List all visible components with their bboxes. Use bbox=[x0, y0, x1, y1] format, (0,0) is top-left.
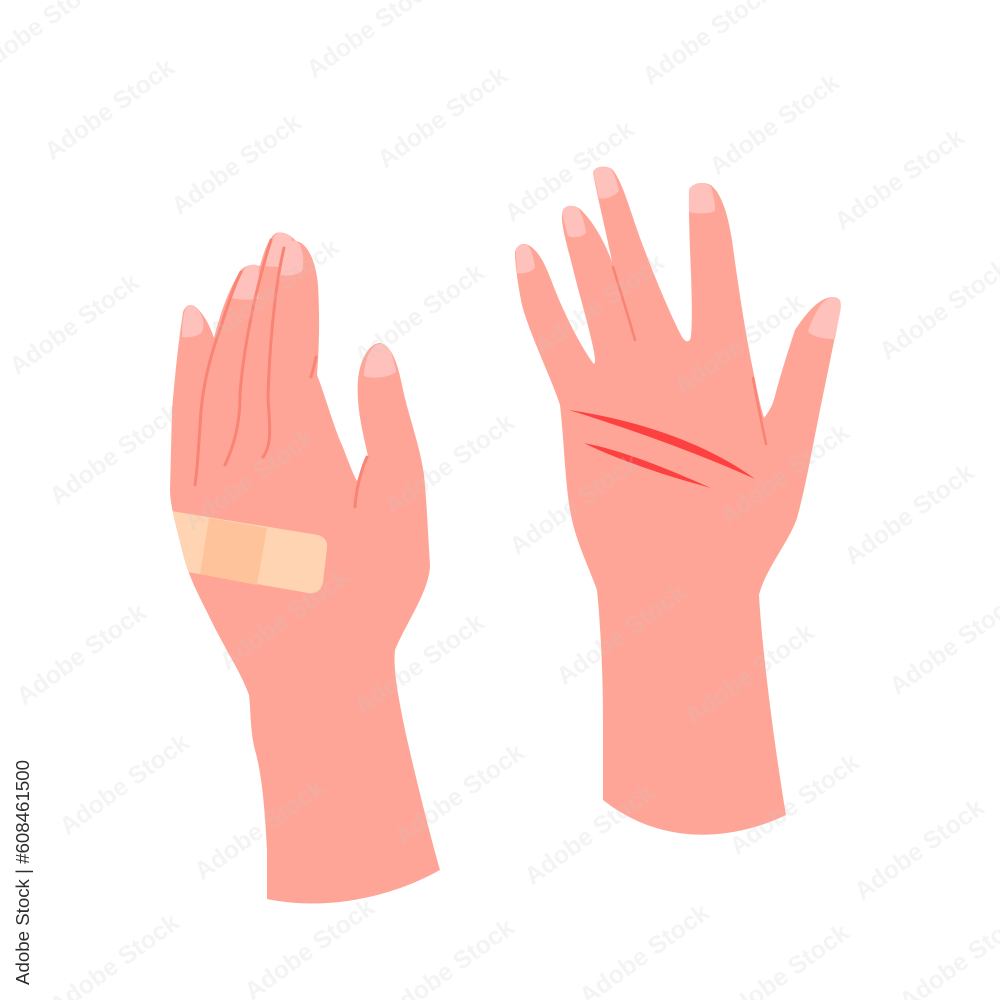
stock watermark pattern: Adobe Stock bbox=[504, 448, 644, 561]
right hand fingernails bbox=[516, 167, 841, 339]
stock watermark pattern: Adobe Stock bbox=[189, 773, 329, 886]
stock watermark pattern: Adobe Stock bbox=[669, 288, 809, 401]
stock watermark pattern: Adobe Stock bbox=[44, 398, 184, 511]
stock watermark pattern: Adobe Stock bbox=[372, 61, 512, 174]
left hand silhouette bbox=[170, 232, 440, 903]
stock watermark pattern: Adobe Stock bbox=[54, 728, 194, 841]
stock watermark pattern: Adobe Stock bbox=[724, 748, 864, 861]
stock watermark pattern: Adobe Stock bbox=[849, 793, 989, 906]
vertical stock id text: Adobe Stock | #608461500 bbox=[13, 760, 33, 985]
bandage bbox=[165, 510, 327, 593]
stock watermark pattern: Adobe Stock bbox=[499, 115, 639, 228]
stock watermark pattern: Adobe Stock bbox=[39, 53, 179, 166]
stock watermark pattern: Adobe Stock bbox=[529, 248, 669, 361]
stock watermark pattern: Adobe Stock bbox=[704, 68, 844, 181]
long cut bbox=[569, 410, 755, 479]
left hand finger crease lines bbox=[195, 240, 367, 507]
stock watermark pattern: Adobe Stock bbox=[11, 598, 151, 711]
bandage gauze pad bbox=[200, 518, 267, 585]
stock watermark pattern: Adobe Stock bbox=[204, 233, 344, 346]
stock watermark pattern: Adobe Stock bbox=[214, 563, 354, 676]
stock watermark pattern: Adobe Stock bbox=[389, 738, 529, 851]
right hand silhouette bbox=[515, 167, 841, 835]
stock watermark pattern: Adobe Stock bbox=[829, 123, 969, 236]
stock watermark pattern: Adobe Stock bbox=[179, 423, 319, 536]
short cut bbox=[584, 443, 711, 488]
left hand fingernails bbox=[182, 233, 396, 378]
stock watermark pattern: Adobe Stock bbox=[714, 418, 854, 531]
stock watermark pattern: Adobe Stock bbox=[166, 108, 306, 221]
stock watermark pattern: Adobe Stock bbox=[679, 618, 819, 731]
right hand with cuts bbox=[515, 167, 841, 835]
stock watermark pattern: Adobe Stock bbox=[349, 608, 489, 721]
stock watermark pattern: Adobe Stock bbox=[839, 458, 979, 571]
stock watermark pattern: Adobe Stock bbox=[551, 578, 691, 691]
right hand finger crease lines bbox=[613, 267, 766, 444]
left hand with bandage bbox=[165, 232, 440, 903]
stock watermark pattern: Adobe Stock bbox=[4, 268, 144, 381]
stock watermark pattern: Adobe Stock bbox=[379, 408, 519, 521]
bandage strip bbox=[165, 510, 327, 593]
stock watermark pattern: Adobe Stock bbox=[349, 258, 489, 371]
stock watermark pattern: Adobe Stock bbox=[519, 778, 659, 891]
